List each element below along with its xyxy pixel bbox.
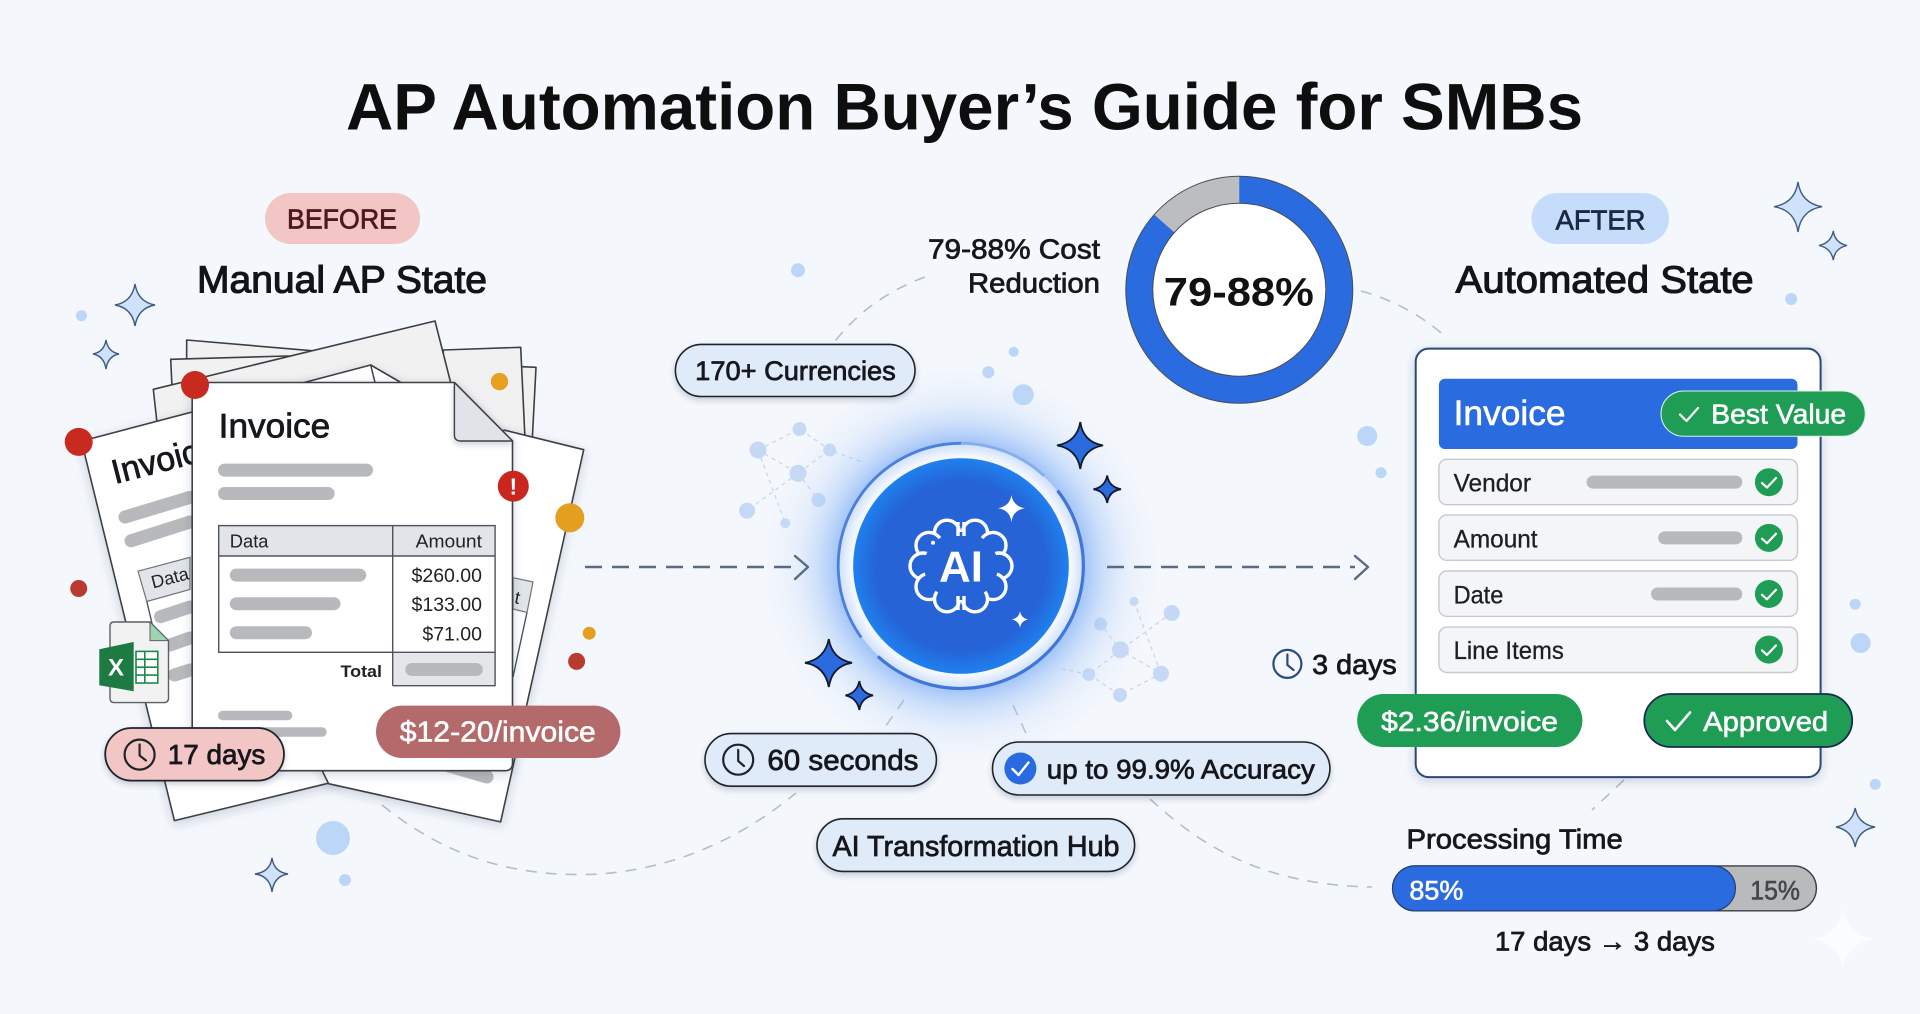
row: line items: Line Items bbox=[1454, 637, 1564, 665]
badge: before bbox=[265, 193, 420, 244]
pill: 60 seconds: 60 seconds bbox=[767, 745, 918, 777]
row: date bbox=[1439, 571, 1798, 616]
pill: best value bbox=[1661, 391, 1865, 436]
pill: accuracy: up to 99.9% Accuracy bbox=[1047, 754, 1315, 784]
back right invoice bbox=[198, 430, 584, 822]
title: AP Automation Buyer’s Guide for SMBs bbox=[346, 70, 1583, 144]
decorative sparkles and dots bbox=[70, 284, 596, 892]
decorative white star bbox=[1814, 910, 1872, 968]
panel: before manual AP state bbox=[65, 176, 1881, 968]
row: date: Date bbox=[1454, 582, 1503, 610]
sparkles: around hub bbox=[805, 422, 1121, 710]
invoice table: $133.00 bbox=[412, 594, 482, 616]
row: vendor: Vendor bbox=[1454, 469, 1531, 497]
invoice table: $71.00 bbox=[422, 624, 482, 646]
pill: cost after: $2.36/invoice bbox=[1381, 706, 1558, 737]
network: left nodes bbox=[739, 422, 862, 528]
row: vendor bbox=[1439, 459, 1798, 505]
pill: AI transformation hub bbox=[817, 819, 1135, 871]
panel: AI hub particles bbox=[739, 263, 1386, 702]
decorative sparkles and dots bbox=[1774, 182, 1881, 847]
connector: dashed flow curves bbox=[382, 277, 1624, 887]
invoice table: Total bbox=[340, 662, 382, 681]
label: cost reduction: 79-88% Cost bbox=[928, 234, 1100, 265]
badge: after bbox=[1532, 193, 1669, 244]
caption: days comparison: 17 days → 3 days bbox=[1495, 927, 1715, 957]
pill: currencies: 170+ Currencies bbox=[695, 356, 896, 386]
label: cost reduction: Reduction bbox=[968, 268, 1100, 299]
badge: after: AFTER bbox=[1556, 205, 1646, 236]
pill: AI transformation hub: AI Transformation Hub bbox=[832, 831, 1120, 863]
pill: approved: Approved bbox=[1703, 706, 1828, 737]
main invoice bbox=[192, 382, 512, 771]
heading: manual AP state: Manual AP State bbox=[197, 260, 487, 302]
row: line items bbox=[1439, 627, 1798, 672]
icon: AI brain hub bbox=[763, 368, 1159, 764]
invoice table: $260.00 bbox=[412, 565, 482, 587]
chart: processing time progress: 85% bbox=[1409, 876, 1463, 906]
pill: approved bbox=[1644, 694, 1852, 747]
panel: after automated state bbox=[1273, 182, 1881, 957]
pill: cost after bbox=[1357, 694, 1582, 747]
invoice card bbox=[1416, 349, 1821, 777]
invoice table: Amount bbox=[416, 531, 482, 551]
arrow: hub to after bbox=[1107, 556, 1368, 579]
icon: AI brain hub: AI bbox=[939, 542, 983, 591]
icon: alert: ! bbox=[509, 474, 517, 500]
badge: before: BEFORE bbox=[287, 204, 397, 234]
chart: cost reduction donut bbox=[1126, 176, 1353, 403]
back right invoice: t bbox=[513, 587, 522, 608]
label: 3 days: 3 days bbox=[1312, 649, 1397, 680]
heading: automated state: Automated State bbox=[1456, 259, 1754, 301]
chart: processing time progress: 15% bbox=[1750, 876, 1800, 906]
icon: alert bbox=[498, 471, 529, 502]
pill: 17 days bbox=[105, 728, 284, 781]
network: right nodes bbox=[1058, 597, 1180, 702]
pill: 60 seconds bbox=[705, 734, 936, 786]
card header bbox=[1439, 379, 1798, 449]
icon: excel file: X bbox=[108, 654, 124, 682]
pill: currencies bbox=[675, 344, 915, 396]
label: processing time: Processing Time bbox=[1406, 824, 1623, 855]
pill: 17 days: 17 days bbox=[168, 739, 265, 770]
pill: accuracy bbox=[992, 742, 1330, 795]
chart: processing time progress bbox=[1393, 824, 1816, 957]
invoice table: Data bbox=[230, 531, 269, 551]
pill: invoice cost before bbox=[376, 706, 620, 758]
back left invoice: Invoice bbox=[107, 428, 221, 492]
pins: status dots bbox=[65, 371, 584, 532]
icon: excel file bbox=[99, 622, 168, 703]
icon: brain outline bbox=[910, 520, 1012, 612]
arrow: before to hub bbox=[585, 556, 808, 579]
label: 3 days bbox=[1273, 649, 1397, 680]
chart: cost reduction donut: 79-88% bbox=[1164, 270, 1314, 314]
back left invoice: Data bbox=[149, 563, 192, 592]
row: amount bbox=[1439, 515, 1798, 560]
main invoice: Invoice bbox=[219, 408, 330, 446]
pill: invoice cost before: $12-20/invoice bbox=[400, 717, 596, 749]
row: amount: Amount bbox=[1454, 526, 1538, 554]
label: cost reduction bbox=[928, 234, 1100, 299]
card header: Invoice bbox=[1454, 394, 1566, 433]
back left invoice bbox=[82, 365, 435, 821]
stack of invoices bbox=[65, 321, 584, 822]
invoice table bbox=[219, 526, 495, 686]
pill: best value: Best Value bbox=[1711, 399, 1846, 430]
